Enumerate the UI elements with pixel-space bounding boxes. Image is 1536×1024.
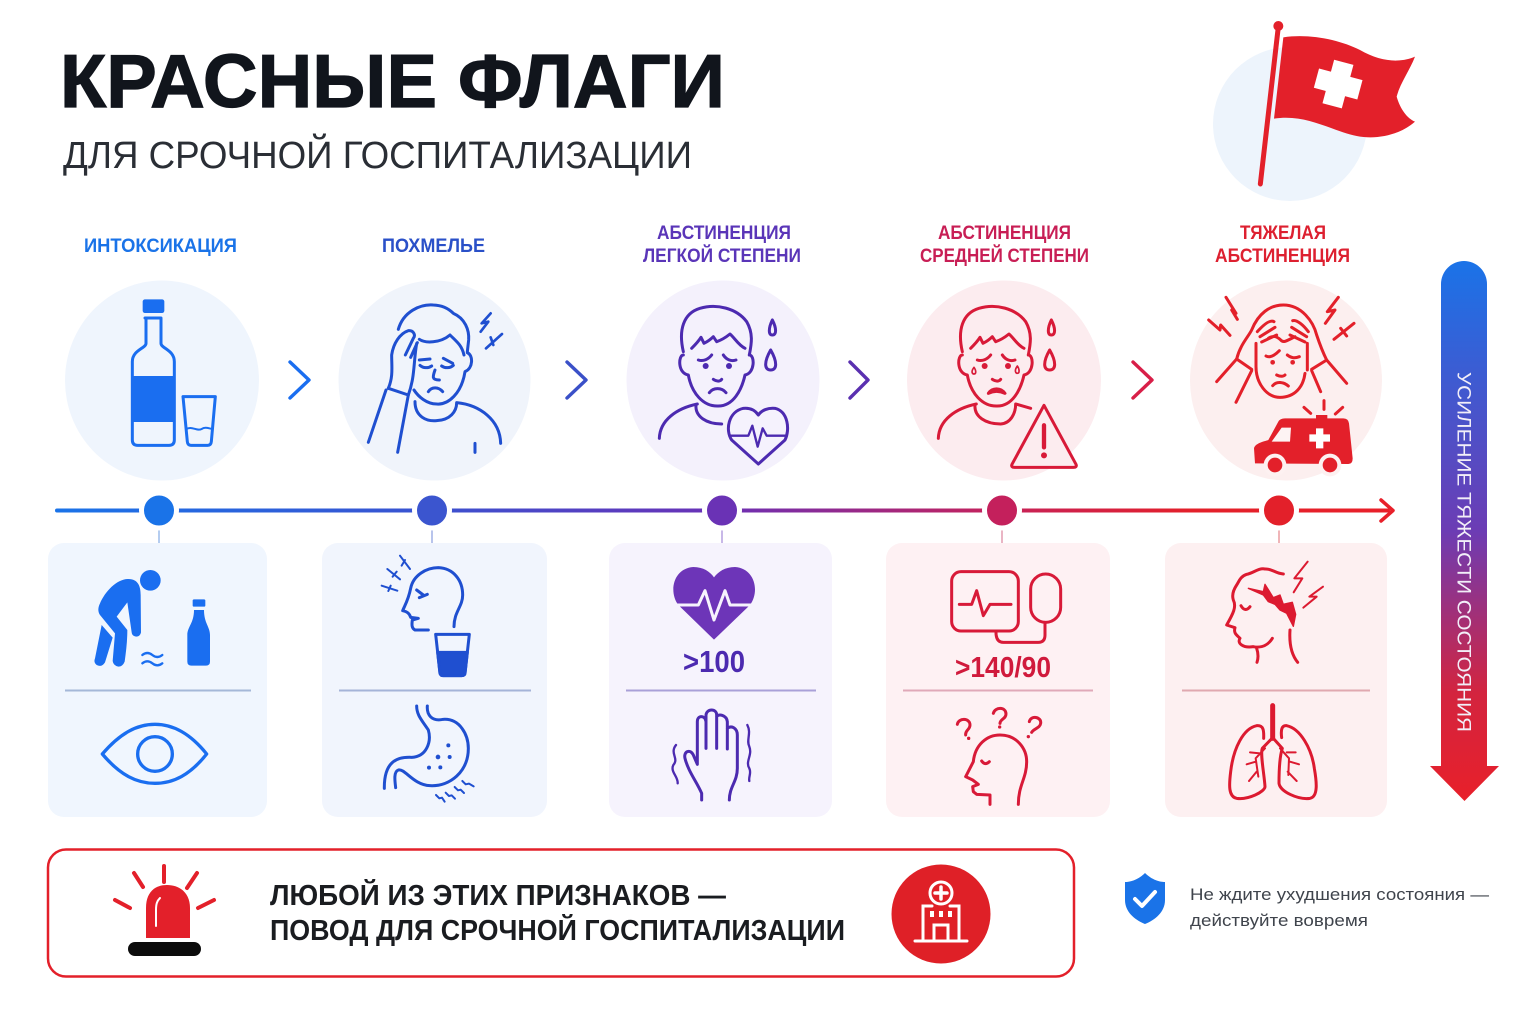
stage label: severe withdrawal: ТЯЖЕЛАЯ bbox=[1240, 223, 1326, 244]
icon: shield with check bbox=[1125, 873, 1165, 924]
callout text bbox=[270, 878, 845, 947]
stage label: mild withdrawal bbox=[643, 223, 801, 267]
icon: heart with pulse bbox=[673, 567, 755, 640]
title: КРАСНЫЕ ФЛАГИ bbox=[60, 39, 725, 123]
panel: severe withdrawal signs bbox=[1165, 543, 1387, 817]
icon: hospital bbox=[892, 864, 990, 964]
arrow: stage 3 to 4 bbox=[850, 362, 868, 398]
severity arrow bbox=[1430, 261, 1499, 801]
icon: red flag with cross bbox=[1213, 21, 1415, 201]
panel: hangover signs bbox=[322, 543, 547, 817]
stage circle: sad boy with heart bbox=[626, 280, 820, 480]
icon: lungs bbox=[1230, 706, 1316, 799]
panel: intoxication signs bbox=[48, 543, 267, 817]
stage label: intoxication: ИНТОКСИКАЦИЯ bbox=[84, 236, 237, 257]
timeline with stage markers bbox=[55, 493, 1393, 543]
stage circle: bottle and glass bbox=[65, 280, 259, 480]
severity label: УСИЛЕНИЕ ТЯЖЕСТИ СОСТОЯНИЯ bbox=[1452, 372, 1474, 732]
stage label: severe withdrawal bbox=[1215, 223, 1350, 267]
heart rate value: >100 bbox=[683, 644, 745, 679]
note text bbox=[1190, 885, 1489, 930]
note text: действуйте вовремя bbox=[1190, 911, 1368, 930]
stage circle: severe headache and ambulance bbox=[1190, 280, 1382, 480]
stage label: moderate withdrawal: СРЕДНЕЙ СТЕПЕНИ bbox=[920, 245, 1089, 267]
stage label: hangover: ПОХМЕЛЬЕ bbox=[382, 236, 485, 257]
note text: Не ждите ухудшения состояния — bbox=[1190, 885, 1489, 904]
panel: moderate withdrawal signs bbox=[886, 543, 1110, 817]
stage label: mild withdrawal: ЛЕГКОЙ СТЕПЕНИ bbox=[643, 245, 801, 267]
icon: confused head bbox=[957, 708, 1041, 804]
icon: head with lightning bbox=[1227, 562, 1323, 662]
stage label: mild withdrawal: АБСТИНЕНЦИЯ bbox=[657, 223, 791, 244]
stage label: severe withdrawal: АБСТИНЕНЦИЯ bbox=[1215, 246, 1350, 267]
icon: eye bbox=[102, 724, 207, 783]
arrow: stage 2 to 3 bbox=[567, 362, 586, 398]
arrow: stage 1 to 2 bbox=[290, 362, 309, 398]
icon: blood pressure monitor bbox=[952, 572, 1061, 642]
arrow: stage 4 to 5 bbox=[1133, 362, 1152, 398]
callout text: ЛЮБОЙ ИЗ ЭТИХ ПРИЗНАКОВ — bbox=[270, 878, 726, 912]
blood pressure value: >140/90 bbox=[955, 652, 1051, 684]
icon: trembling hand bbox=[673, 710, 750, 800]
callout text: ПОВОД ДЛЯ СРОЧНОЙ ГОСПИТАЛИЗАЦИИ bbox=[270, 913, 845, 947]
stage label: moderate withdrawal: АБСТИНЕНЦИЯ bbox=[938, 223, 1071, 244]
panel: mild withdrawal signs bbox=[609, 543, 832, 817]
icon: head and glass of water bbox=[382, 556, 469, 676]
icon: irritated stomach bbox=[384, 706, 474, 802]
icon: bent over man with bottle bbox=[94, 570, 210, 667]
subtitle: ДЛЯ СРОЧНОЙ ГОСПИТАЛИЗАЦИИ bbox=[63, 132, 692, 177]
stage circle: crying boy with warning bbox=[907, 280, 1101, 480]
callout: urgent hospitalization bbox=[48, 850, 1074, 976]
stage label: moderate withdrawal bbox=[920, 223, 1089, 267]
stage circle: man with headache bbox=[338, 280, 530, 480]
icon: siren bbox=[115, 866, 214, 956]
